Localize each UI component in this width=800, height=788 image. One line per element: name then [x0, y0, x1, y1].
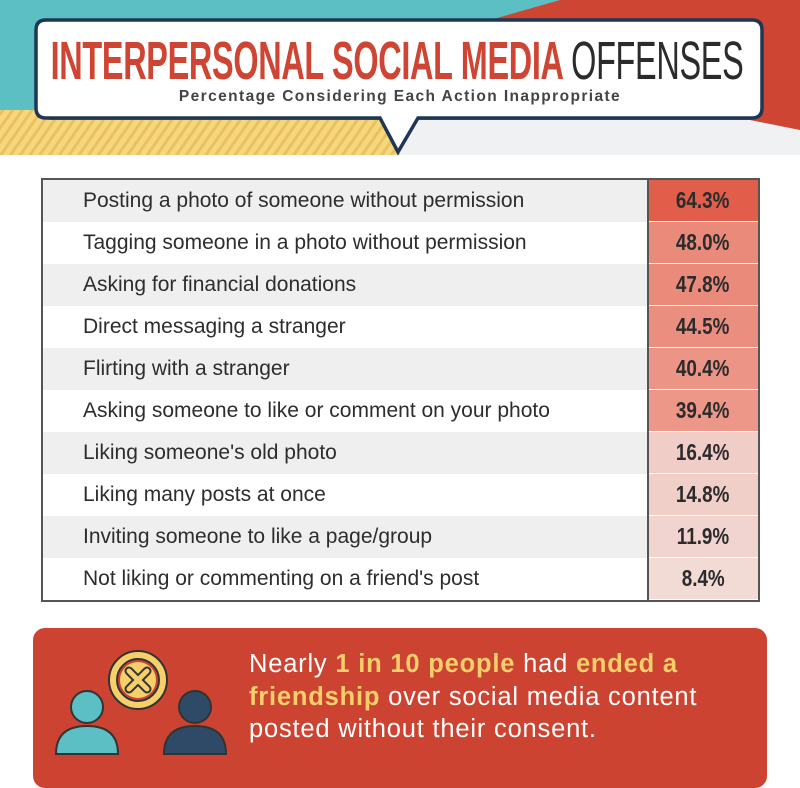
- callout text: Nearly 1 in 10 people had ended a friendship over social media content posted without their consent.: [249, 650, 697, 743]
- table: Asking for financial donations: [83, 273, 356, 296]
- table: 47.8%: [676, 271, 730, 297]
- icon: two people with x: [55, 650, 227, 755]
- table: Posting a photo of someone without permission: [83, 189, 524, 212]
- table: 64.3%: [676, 187, 730, 213]
- table: Flirting with a stranger: [83, 357, 290, 380]
- title speech bubble: [34, 18, 764, 156]
- table: Not liking or commenting on a friend's post: [83, 567, 479, 590]
- table: 39.4%: [676, 397, 730, 423]
- table: Inviting someone to like a page/group: [83, 525, 432, 548]
- table: Liking someone's old photo: [83, 441, 337, 464]
- title: INTERPERSONAL SOCIAL MEDIA OFFENSES: [51, 31, 743, 91]
- table: 16.4%: [676, 439, 730, 465]
- table: 40.4%: [676, 355, 730, 381]
- table: 8.4%: [682, 565, 724, 591]
- header background: [0, 0, 800, 155]
- table: Direct messaging a stranger: [83, 315, 346, 338]
- table: Tagging someone in a photo without permission: [83, 231, 527, 254]
- table: Asking someone to like or comment on your photo: [83, 399, 550, 422]
- table: 44.5%: [676, 313, 730, 339]
- table: 14.8%: [676, 481, 730, 507]
- callout: [33, 628, 767, 788]
- subtitle: Percentage Considering Each Action Inappropriate: [179, 88, 621, 105]
- table: 48.0%: [676, 229, 730, 255]
- table: 11.9%: [677, 523, 729, 549]
- table: [41, 178, 760, 602]
- table: Liking many posts at once: [83, 483, 326, 506]
